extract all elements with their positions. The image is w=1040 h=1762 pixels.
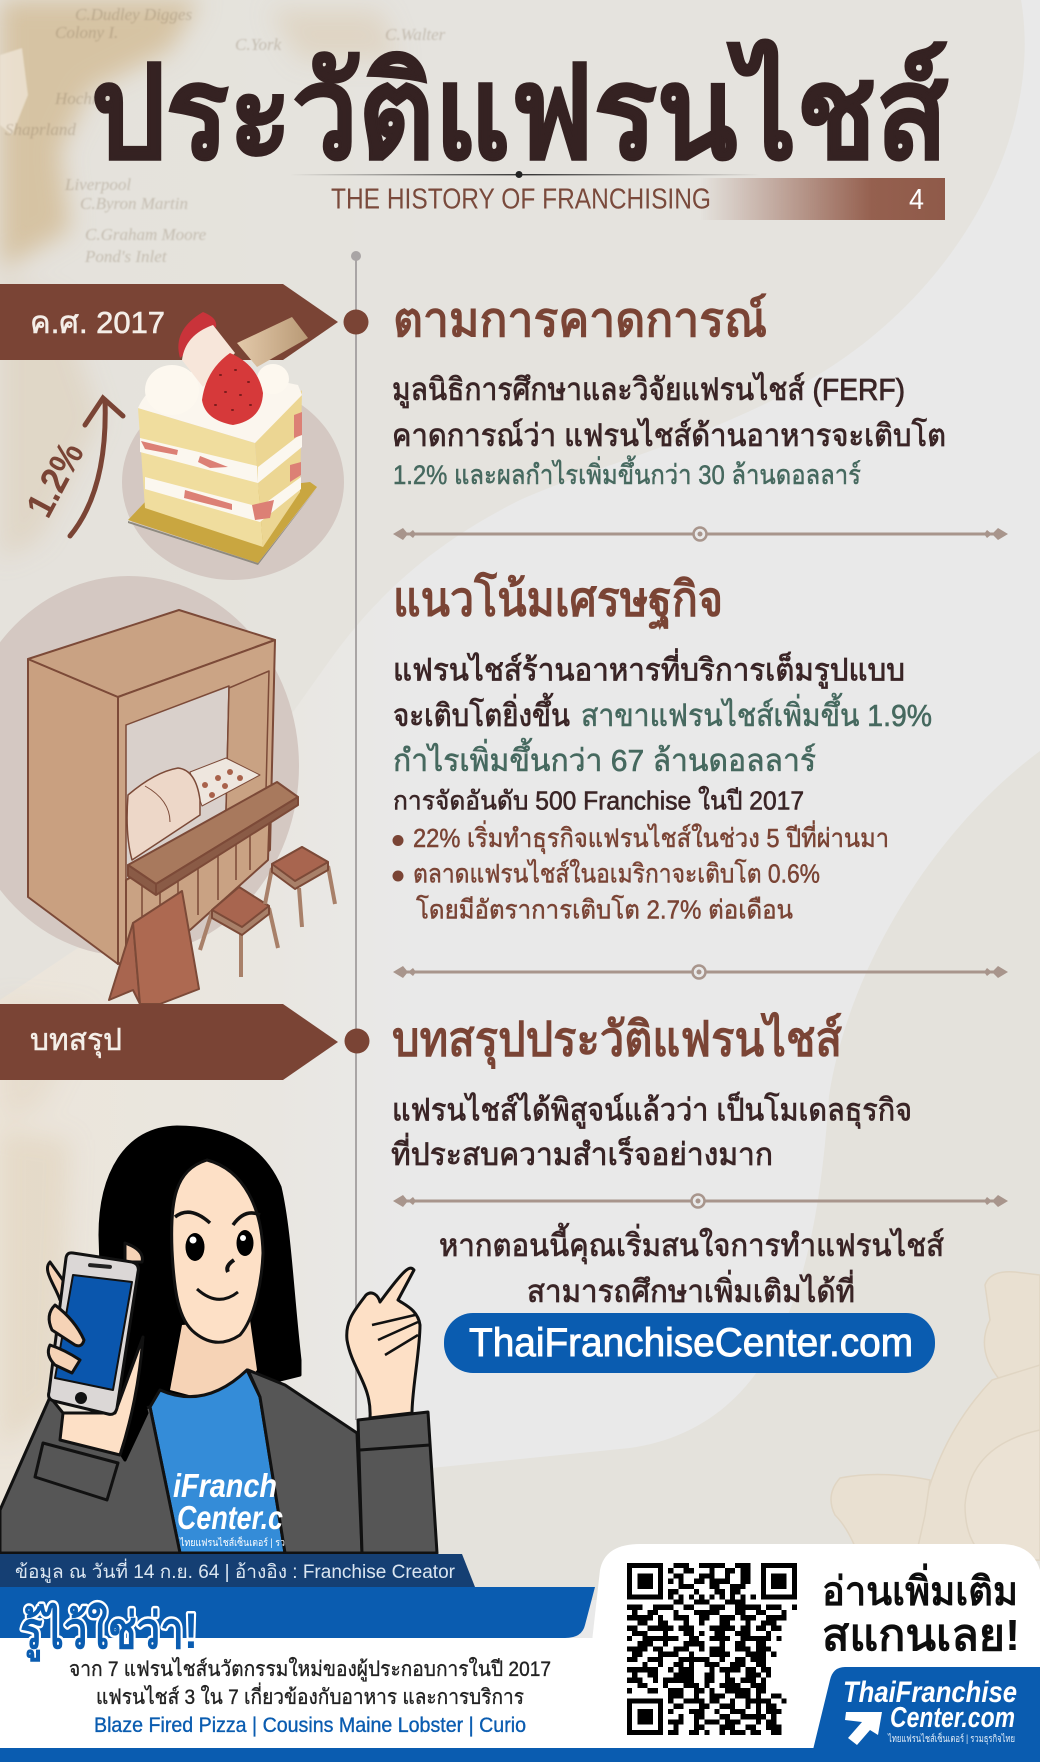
shirt logo: Center.c xyxy=(177,1499,283,1536)
heading: economic trend: แนวโน้มเศรษฐกิจ xyxy=(393,570,723,630)
white footer area xyxy=(0,1638,600,1749)
divider 2 xyxy=(393,966,1008,978)
text block: forecast: มูลนิธิการศึกษาและวิจัยแฟรนไชส์ (FERF) xyxy=(392,372,905,408)
shirt logo: ไทยแฟรนไชส์เซ็นเตอร์ | รว xyxy=(179,1535,285,1549)
title rule with dot xyxy=(290,171,760,178)
callout heading: รู้ไว้ใช่ว่า! xyxy=(20,1602,198,1662)
callout text: แฟรนไชส์ 3 ใน 7 เกี่ยวข้องกับอาหาร และการบริการ xyxy=(96,1682,524,1709)
background: upper beige blob xyxy=(0,0,1025,1000)
text block: trend: การจัดอันดับ 500 Franchise ในปี 2017 xyxy=(393,786,804,816)
brows, nose, smile xyxy=(175,1212,260,1225)
logo: ThaiFranchise Center xyxy=(810,1667,1040,1762)
text block: trend xyxy=(393,648,932,816)
text block: trend: จะเติบโตยิ่งขึ้น xyxy=(393,693,570,733)
website pill xyxy=(444,1313,935,1373)
page number bar xyxy=(700,178,945,220)
bullet list: 22% เริ่มทำธุรกิจแฟรนไชส์ในช่วง 5 ปีที่ผ่านมา xyxy=(413,820,889,854)
divider 3 xyxy=(393,1194,1008,1208)
left cuff xyxy=(35,1443,118,1500)
text block: forecast xyxy=(392,372,946,490)
cardigan right xyxy=(248,1370,362,1553)
background: vintage map: Hochmer xyxy=(54,89,119,108)
background: vintage map: Pond's Inlet xyxy=(84,247,168,266)
phone xyxy=(49,1253,138,1414)
QR heading: อ่านเพิ่มเติม xyxy=(822,1563,1018,1614)
callout text: จาก 7 แฟรนไชส์นวัตกรรมใหม่ของผู้ประกอบการในปี 2017 xyxy=(69,1657,551,1682)
shirt xyxy=(150,1370,285,1553)
text block: trend: กำไรเพิ่มขึ้นกว่า 67 ล้านดอลลาร์ xyxy=(393,738,816,778)
hair strand over shoulder xyxy=(112,1370,147,1460)
right hand xyxy=(347,1268,420,1418)
text block: summary xyxy=(391,1092,912,1172)
background: vintage map: C.Dudley Digges xyxy=(75,5,192,24)
character: woman with phone xyxy=(0,1127,437,1553)
page number bar: 4 xyxy=(909,184,924,216)
heading: forecast: ตามการคาดการณ์ xyxy=(393,293,767,347)
text block: forecast: 1.2% และผลกำไรเพิ่มขึ้นกว่า 30 ล้านดอลลาร์ xyxy=(393,455,861,490)
divider 1 xyxy=(393,528,1008,540)
background: vintage map: Liverpool xyxy=(64,175,131,194)
ear and thumb xyxy=(125,1243,142,1262)
QR code xyxy=(627,1563,797,1735)
text block: summary: แฟรนไชส์ได้พิสูจน์แล้วว่า เป็นโมเดลธุรกิจ xyxy=(392,1092,912,1130)
icon: faint money bag xyxy=(831,1272,1040,1560)
bullet list: โดยมีอัตราการเติบโต 2.7% ต่อเดือน xyxy=(416,894,793,924)
shirt logo: iFranch xyxy=(173,1467,277,1504)
QR heading: สแกนเลย! xyxy=(822,1611,1020,1660)
text block: call to action: สามารถศึกษาเพิ่มเติมได้ที่ xyxy=(527,1270,855,1309)
background: vintage map: C.Byron Martin xyxy=(80,194,188,213)
hair xyxy=(100,1127,300,1430)
eyes xyxy=(186,1233,204,1261)
arrow: growth 1.2% xyxy=(19,398,123,536)
icon: food kiosk xyxy=(28,610,335,1004)
timeline rail xyxy=(351,251,361,1420)
subtitle: THE HISTORY OF FRANCHISING xyxy=(331,184,711,216)
shirt logo xyxy=(173,1467,285,1549)
ribbon: summary xyxy=(0,1004,338,1080)
ribbon: summary: บทสรุป xyxy=(30,1024,122,1059)
timeline dot 2 xyxy=(344,1028,370,1054)
source tab: ข้อมูล ณ วันที่ 14 ก.ย. 64 | อ้างอิง : Franchise Creator xyxy=(15,1558,456,1583)
panel: kiosk backdrop xyxy=(0,576,299,956)
ribbon: year 2017 xyxy=(0,284,338,360)
neck xyxy=(170,1320,257,1398)
right sleeve xyxy=(358,1412,437,1553)
bullet list xyxy=(392,820,889,924)
text block: forecast: คาดการณ์ว่า แฟรนไชส์ด้านอาหารจะเติบโต xyxy=(392,418,946,453)
callout text xyxy=(69,1657,551,1737)
QR panel xyxy=(580,1544,1040,1749)
text block: call to action xyxy=(439,1223,944,1309)
timeline dot 1 xyxy=(344,310,368,334)
icon: strawberry shortcake xyxy=(128,312,317,565)
left wrist xyxy=(60,1337,143,1455)
background: vintage map: C.Walter xyxy=(385,25,446,44)
panel: cake backdrop xyxy=(122,384,344,580)
fingers xyxy=(48,1305,84,1373)
ribbon: year 2017: ค.ศ. 2017 xyxy=(30,305,165,340)
background: vintage map: C.York xyxy=(235,35,282,54)
text block: call to action: หากตอนนี้คุณเริ่มสนใจการทำแฟรนไชส์ xyxy=(439,1223,944,1265)
source tab xyxy=(0,1554,475,1587)
face xyxy=(172,1160,263,1342)
title: ประวัติแฟรนไชส์ xyxy=(91,39,949,186)
text block: summary: ที่ประสบความสำเร็จอย่างมาก xyxy=(391,1133,773,1172)
cardigan left xyxy=(0,1397,180,1553)
callout text: Blaze Fired Pizza | Cousins Maine Lobster | Curio xyxy=(94,1714,526,1737)
QR heading xyxy=(822,1563,1020,1660)
text block: trend: แฟรนไชส์ร้านอาหารที่บริการเต็มรูปแบบ xyxy=(393,648,905,688)
background: vintage map: C.Graham Moore xyxy=(85,225,207,244)
background: vintage map xyxy=(0,0,446,1450)
blue band xyxy=(0,1587,595,1638)
bullet list: ตลาดแฟรนไชส์ในอเมริกาจะเติบโต 0.6% xyxy=(413,858,820,888)
background: lower right beige blob xyxy=(431,751,1040,1600)
background: vintage map: Colony I. xyxy=(55,23,118,42)
website pill: ThaiFranchiseCenter.com xyxy=(469,1321,913,1365)
blue bottom strip xyxy=(0,1748,1040,1762)
background: vintage map: Shaprland xyxy=(5,120,76,139)
heading: summary: บทสรุปประวัติแฟรนไชส์ xyxy=(392,1010,843,1070)
text block: trend: สาขาแฟรนไชส์เพิ่มขึ้น 1.9% xyxy=(581,693,932,733)
arrow: growth 1.2%: 1.2% xyxy=(19,436,93,524)
